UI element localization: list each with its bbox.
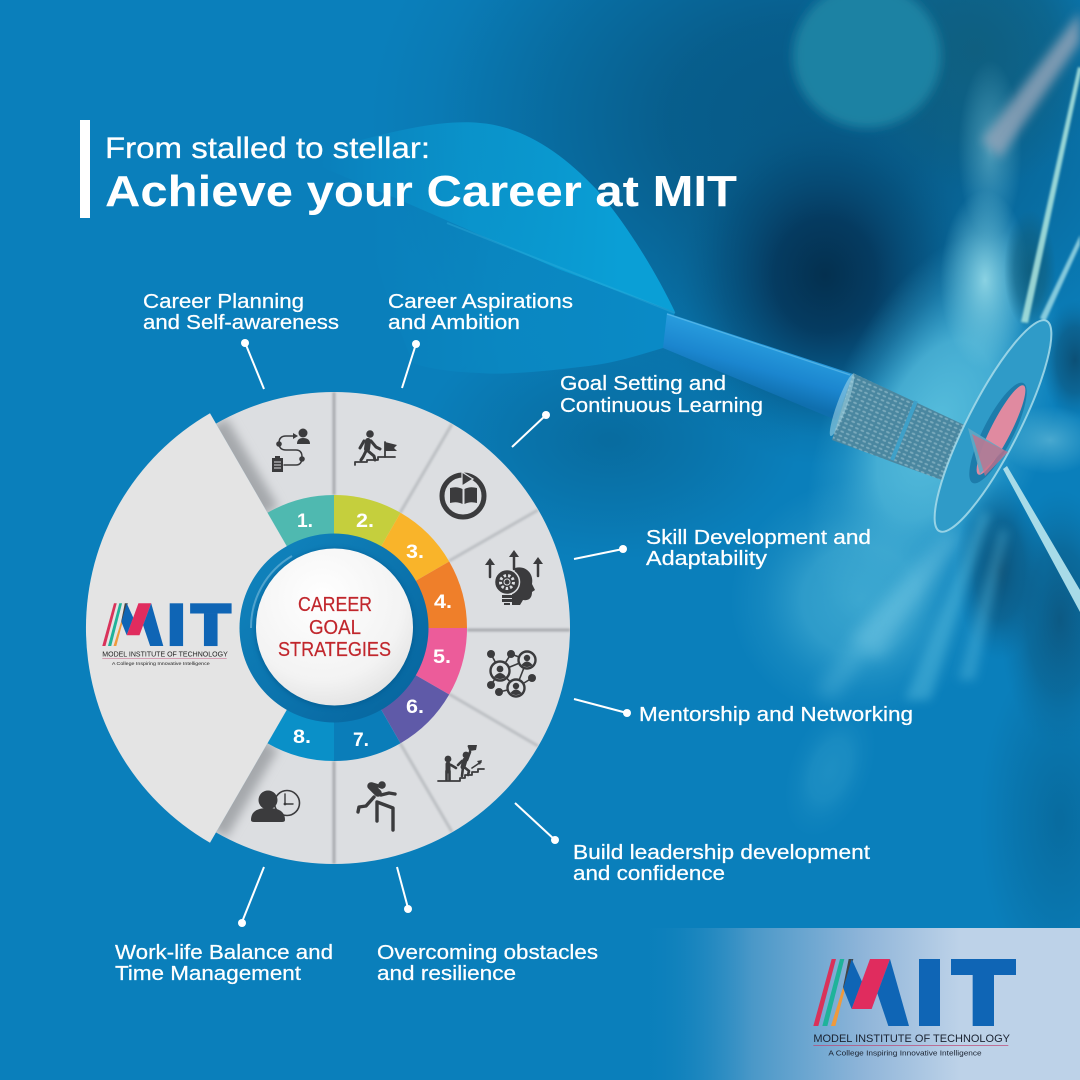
numbers: 3. bbox=[406, 542, 424, 563]
label: career planning: and Self-awareness bbox=[143, 312, 339, 334]
numbers: 4. bbox=[434, 592, 452, 613]
numbers: 7. bbox=[353, 730, 369, 751]
numbers bbox=[293, 511, 452, 751]
large MIT logo bbox=[813, 959, 1016, 1057]
numbers: 8. bbox=[293, 727, 311, 748]
connector 3 bbox=[512, 411, 550, 447]
center circle: GOAL bbox=[309, 617, 361, 639]
title: Achieve your Career at MIT bbox=[105, 167, 737, 216]
label: leadership: and confidence bbox=[573, 863, 725, 885]
icon: climbing stairs to flag bbox=[355, 430, 397, 465]
icon: career planning path bbox=[272, 428, 310, 472]
label: career aspirations: Career Aspirations bbox=[388, 291, 573, 313]
title bar bbox=[80, 120, 90, 218]
label: leadership: Build leadership development bbox=[573, 842, 870, 864]
connector 4 bbox=[574, 545, 627, 559]
icon: lightbulb head with arrows bbox=[485, 550, 543, 605]
connector 1 bbox=[241, 339, 264, 389]
title bbox=[105, 132, 737, 216]
connector 5 bbox=[574, 699, 631, 717]
small MIT logo bbox=[102, 603, 232, 667]
label: career planning: Career Planning bbox=[143, 291, 304, 313]
icon: book in circular arrow bbox=[442, 472, 484, 517]
label: goal setting: Continuous Learning bbox=[560, 395, 763, 417]
dart flight bbox=[300, 122, 675, 374]
label: work-life balance: Time Management bbox=[115, 963, 301, 985]
label: overcoming obstacles: and resilience bbox=[377, 963, 516, 985]
left logo panel bbox=[86, 413, 334, 843]
dart bbox=[300, 122, 1070, 543]
label: mentorship: Mentorship and Networking bbox=[639, 704, 913, 726]
blue inner ring bbox=[240, 534, 428, 722]
large MIT logo: A College Inspiring Innovative Intelligence bbox=[828, 1048, 982, 1057]
label: skill development bbox=[646, 527, 871, 570]
connector 6 bbox=[515, 803, 559, 844]
icon: person with clock bbox=[251, 790, 300, 822]
title: From stalled to stellar: bbox=[105, 132, 430, 165]
label: overcoming obstacles bbox=[377, 942, 598, 985]
label: skill development: Skill Development and bbox=[646, 527, 871, 549]
coloured number ring bbox=[268, 495, 467, 761]
center circle: CAREER bbox=[298, 594, 372, 616]
numbers: 1. bbox=[297, 511, 313, 532]
numbers: 6. bbox=[406, 697, 424, 718]
numbers: 2. bbox=[356, 511, 374, 532]
small MIT logo: A College Inspiring Innovative Intelligence bbox=[112, 661, 210, 667]
bottom right light panel bbox=[640, 928, 1080, 1080]
icon: hurdler bbox=[358, 781, 395, 830]
label: work-life balance bbox=[115, 942, 333, 985]
connector 7 bbox=[397, 867, 412, 913]
icon: network of people bbox=[487, 650, 536, 696]
label: skill development: Adaptability bbox=[646, 548, 767, 570]
connector 2 bbox=[402, 340, 420, 388]
label: career aspirations bbox=[388, 291, 573, 334]
large MIT logo: MODEL INSTITUTE OF TECHNOLOGY bbox=[813, 1033, 1011, 1045]
center circle bbox=[254, 548, 414, 708]
label: career planning bbox=[143, 291, 339, 334]
segment shadows bbox=[216, 392, 570, 864]
center circle: STRATEGIES bbox=[278, 639, 391, 661]
label: leadership bbox=[573, 842, 870, 885]
label: work-life balance: Work-life Balance and bbox=[115, 942, 333, 964]
target bullseye bbox=[916, 309, 1070, 543]
label: goal setting: Goal Setting and bbox=[560, 373, 726, 395]
label: overcoming obstacles: Overcoming obstacles bbox=[377, 942, 598, 964]
small MIT logo: MODEL INSTITUTE OF TECHNOLOGY bbox=[102, 651, 228, 658]
strategy wheel bbox=[86, 392, 570, 864]
dart shaft bbox=[663, 313, 853, 420]
label: career aspirations: and Ambition bbox=[388, 312, 520, 334]
right side light glow bbox=[754, 194, 1080, 666]
icon: leader climbing with flag bbox=[438, 745, 484, 781]
numbers: 5. bbox=[433, 647, 451, 668]
wheel grey segments bbox=[216, 392, 570, 864]
connector 8 bbox=[238, 867, 264, 927]
dart barrel bbox=[826, 372, 973, 482]
label: goal setting bbox=[560, 373, 763, 417]
